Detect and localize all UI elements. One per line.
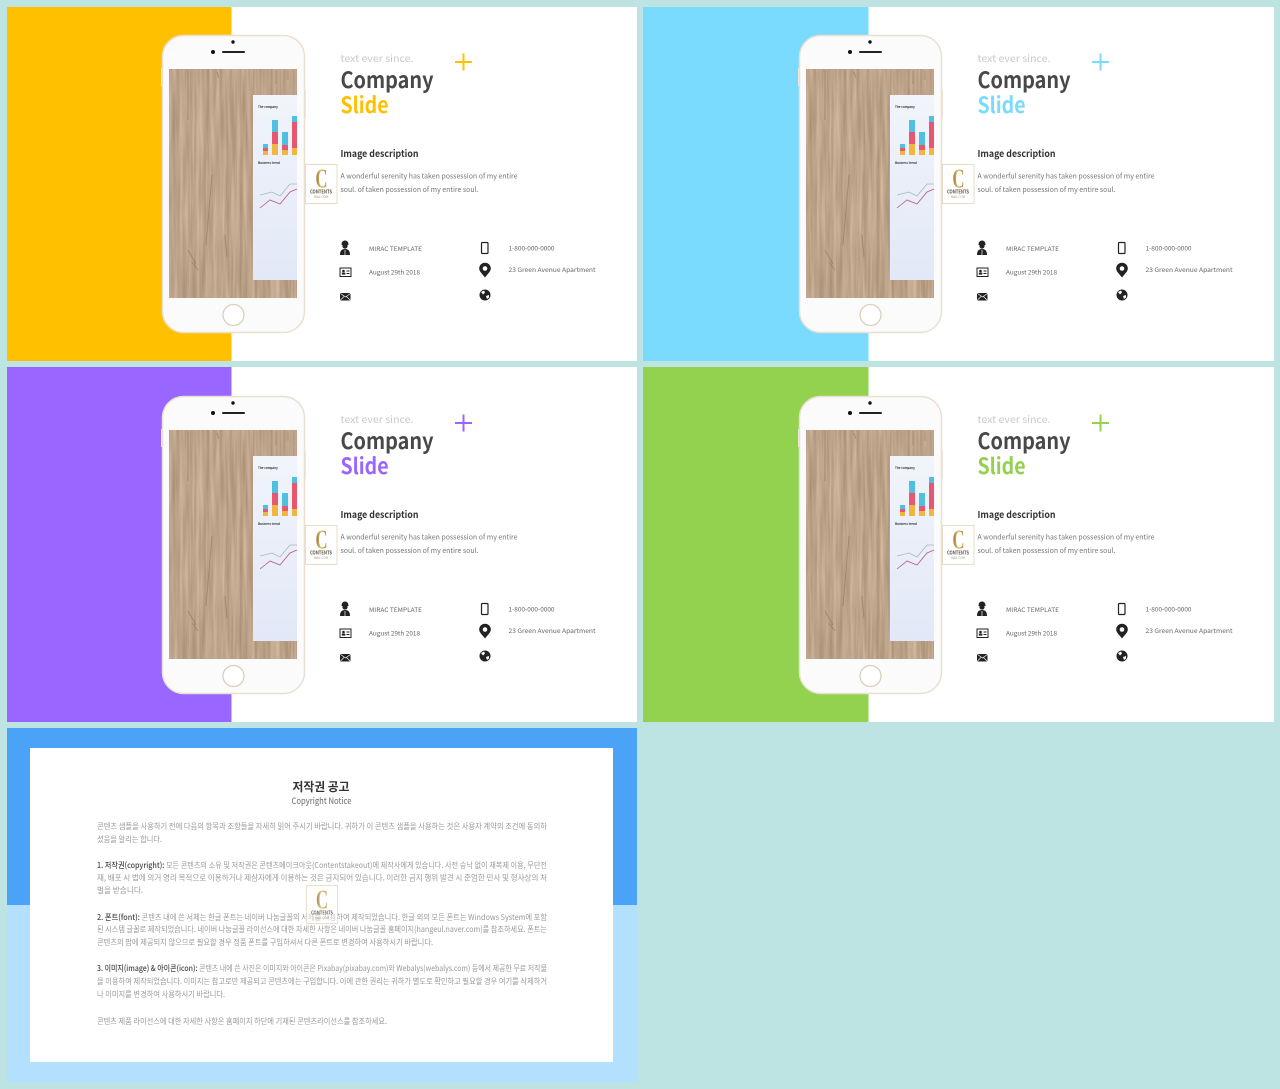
- colour block: [7, 7, 232, 361]
- description text: [340, 172, 518, 195]
- colour block: [7, 367, 232, 722]
- clause 2: font: 2. 폰트(font): 콘텐츠 내에 쓴 서체는 한글 폰트는 네이버 나눔글꼴의 서체를 사용하여 제작되었습니다. 한글 외의 모든 폰트는 Windows System에 포함: [97, 912, 548, 923]
- chart paper on phone screen: Business trend: [258, 522, 280, 526]
- clause 1: copyright: 벌을 받습니다.: [97, 885, 143, 896]
- contact details: 23 Green Avenue Apartment: [508, 265, 596, 274]
- contact details: 1-800-000-0000: [1146, 604, 1192, 614]
- logo badge: MAIL.COM: [314, 195, 329, 199]
- panel: green slide: [643, 367, 1274, 722]
- phone mockup: [161, 396, 306, 694]
- logo badge: C: [316, 524, 328, 554]
- panel: purple slide: [7, 367, 637, 722]
- chart paper on phone screen: Business trend: [895, 522, 917, 526]
- logo badge: C: [316, 164, 328, 194]
- image description heading: Image description: [978, 146, 1056, 160]
- heading: Company: [340, 424, 434, 456]
- heading: Company: [978, 63, 1071, 95]
- notice intro: [97, 821, 548, 845]
- logo badge overlay: MAIL.COM: [315, 916, 330, 920]
- logo badge: MAIL.COM: [314, 556, 329, 560]
- subtitle: text ever since.: [978, 411, 1051, 426]
- clause 3: image and icon: 나 이미지를 변경하여 사용하시기 바랍니다.: [97, 989, 225, 1000]
- panel: blue slide: [643, 7, 1274, 361]
- logo badge overlay: [306, 884, 338, 924]
- subtitle: text ever since.: [340, 411, 414, 426]
- description text: [340, 532, 518, 556]
- chart paper on phone screen: The company: [895, 466, 915, 470]
- logo badge: MAIL.COM: [951, 195, 966, 199]
- logo badge: C: [952, 524, 964, 554]
- image description heading: Image description: [340, 146, 418, 160]
- contact details: MIRAC TEMPLATE: [1006, 605, 1059, 614]
- description text: A wonderful serenity has taken possession of my entire: [340, 172, 518, 182]
- plus icon: [1092, 414, 1109, 432]
- contact details: MIRAC TEMPLATE: [369, 244, 422, 253]
- contact details: 1-800-000-0000: [1146, 244, 1192, 252]
- heading accent: Slide: [978, 449, 1026, 481]
- logo badge: C: [952, 164, 964, 194]
- plus icon: [455, 54, 472, 70]
- chart paper on phone screen: The company: [258, 466, 278, 470]
- logo badge overlay: CONTENTS: [311, 910, 333, 916]
- clause 2: font: 된 시스템 글꼴로 제작되었습니다. 네이버 나눔글꼴 라이선스에 대한 자세한 사항은 네이버 나눔글꼴 홈페이지(hangeul.naver.com)를 참조하세요. 폰트는: [97, 924, 547, 935]
- contact icons: [340, 602, 491, 662]
- description text: A wonderful serenity has taken possession of my entire: [978, 172, 1155, 182]
- logo badge: [306, 164, 337, 204]
- contact details: August 29th 2018: [369, 628, 421, 638]
- contact icons: [977, 602, 1128, 662]
- chart paper on phone screen: [253, 95, 297, 280]
- heading accent: Slide: [978, 88, 1026, 120]
- clause 1: copyright: 1. 저작권(copyright): 모든 콘텐츠의 소유 및 저작권은 콘텐츠메이크아웃(Contentstakeout)에 제작사에게 있습니다. 사전 승낙 없이 재복제 이용, 무단전: [97, 860, 547, 871]
- logo badge: CONTENTS: [947, 188, 969, 196]
- colour block: [643, 367, 868, 722]
- description text: soul. of taken possession of my entire soul.: [978, 546, 1116, 556]
- logo badge overlay: C: [316, 884, 328, 914]
- notice subtitle: Copyright Notice: [292, 795, 352, 807]
- clause 2: font: [97, 912, 548, 948]
- panel: copyright notice slide: [7, 728, 637, 1082]
- logo badge: MAIL.COM: [951, 556, 966, 560]
- description text: A wonderful serenity has taken possession of my entire: [978, 532, 1155, 542]
- heading accent: Slide: [340, 88, 388, 120]
- contact details: August 29th 2018: [1006, 628, 1058, 638]
- phone mockup: [161, 36, 306, 332]
- plus icon: [455, 414, 472, 432]
- colour block: [643, 7, 868, 361]
- chart paper on phone screen: [890, 95, 934, 280]
- image description heading: Image description: [978, 507, 1056, 521]
- contact details: August 29th 2018: [1006, 268, 1058, 276]
- contact details: 1-800-000-0000: [508, 244, 555, 252]
- description text: [978, 172, 1155, 195]
- contact details: MIRAC TEMPLATE: [369, 605, 422, 614]
- heading: Company: [978, 424, 1071, 456]
- description text: A wonderful serenity has taken possession of my entire: [340, 532, 518, 542]
- clause 3: image and icon: 을 이용하여 제작되었습니다. 이미지는 참고로만 제공되고 콘텐츠에는 구입합니다. 이에 관한 권리는 귀하가 별도로 확인하고 필요할 경우 여기를 삭제하거: [97, 976, 547, 987]
- notice intro: 콘텐츠 샘플을 사용하기 전에 다음의 항목과 조항들을 자세히 읽어 주시기 바랍니다. 귀하가 이 콘텐츠 샘플을 사용하는 것은 사용자 계약의 조건에 동의하: [97, 821, 548, 832]
- chart paper on phone screen: [253, 456, 297, 641]
- description text: soul. of taken possession of my entire soul.: [978, 185, 1116, 195]
- description text: [978, 532, 1155, 556]
- contact details: 23 Green Avenue Apartment: [508, 626, 596, 635]
- clause 2: font: 콘텐츠의 팜에 제공되지 않으므로 필요할 경우 정품 폰트를 구입하셔서 다른 폰트로 변경하여 사용하시기 바랍니다.: [97, 937, 433, 948]
- subtitle: text ever since.: [340, 50, 414, 65]
- clause 3: image and icon: [97, 963, 547, 1000]
- logo badge: CONTENTS: [310, 188, 332, 196]
- plus icon: [1092, 54, 1109, 70]
- contact icons: [340, 240, 491, 300]
- description text: soul. of taken possession of my entire soul.: [340, 546, 479, 556]
- phone mockup: [798, 36, 943, 332]
- contact icons: [977, 240, 1128, 300]
- contact details: August 29th 2018: [369, 268, 421, 276]
- logo badge: CONTENTS: [947, 550, 969, 556]
- contact details: [1006, 604, 1233, 638]
- description text: soul. of taken possession of my entire soul.: [340, 185, 479, 195]
- logo badge: CONTENTS: [310, 550, 332, 556]
- chart paper on phone screen: [890, 456, 934, 641]
- heading accent: Slide: [340, 449, 388, 481]
- clause 3: image and icon: 3. 이미지(image) & 아이콘(icon): 콘텐츠 내에 쓴 사진은 이미지와 아이콘은 Pixabay(pixabay.com)와 Webalys(webalys.com) 등에서 제공한 무료 저작물: [97, 963, 547, 974]
- contact details: 23 Green Avenue Apartment: [1146, 626, 1233, 635]
- contact details: [1006, 244, 1233, 276]
- chart paper on phone screen: Business trend: [258, 161, 280, 165]
- logo badge: [942, 524, 974, 564]
- chart paper on phone screen: The company: [258, 105, 278, 109]
- chart paper on phone screen: The company: [895, 105, 915, 109]
- contact details: MIRAC TEMPLATE: [1006, 244, 1059, 253]
- contact details: 1-800-000-0000: [508, 604, 555, 614]
- contact details: 23 Green Avenue Apartment: [1146, 265, 1233, 274]
- closing line: 콘텐츠 제품 라이선스에 대한 자세한 사항은 홈페이지 하단에 기재된 콘텐츠라이선스를 참조하세요.: [97, 1016, 387, 1027]
- clause 1: copyright: [97, 860, 547, 896]
- heading: Company: [340, 63, 434, 95]
- contact details: [369, 604, 596, 638]
- chart paper on phone screen: Business trend: [895, 161, 917, 165]
- notice title: 저작권 공고: [292, 778, 350, 795]
- notice intro: 셨음을 알리는 합니다.: [97, 834, 162, 845]
- logo badge: [306, 524, 337, 564]
- clause 1: copyright: 재, 배포 시 법에 의거 영리 목적으로 이용하거나 제삼자에게 이용하는 것은 금지되어 있습니다. 이러한 금지 행위 발견 시 준엄한 민사 및 형사상의 처: [97, 872, 547, 884]
- contact details: [369, 244, 596, 276]
- white notice card: [30, 748, 613, 1062]
- image description heading: Image description: [340, 507, 418, 521]
- phone mockup: [798, 396, 943, 694]
- subtitle: text ever since.: [978, 50, 1051, 65]
- panel: yellow slide: [7, 7, 637, 361]
- logo badge: [942, 164, 974, 204]
